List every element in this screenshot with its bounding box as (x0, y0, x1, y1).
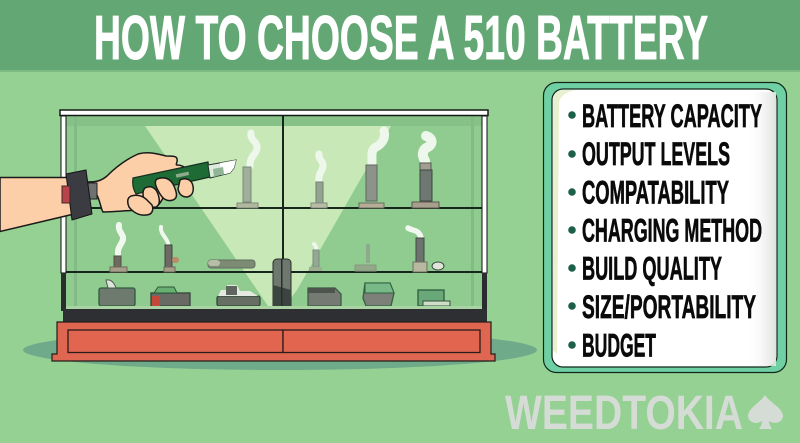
charger 2 (151, 287, 190, 306)
glass back (66, 116, 482, 311)
panel: checklist (544, 82, 786, 372)
light beam (145, 126, 391, 310)
fingers (128, 178, 193, 215)
vape 7 (309, 244, 322, 271)
palm (88, 153, 187, 212)
vape 1 (237, 133, 258, 208)
middle shelf vapes (110, 225, 444, 272)
top frame (60, 110, 488, 116)
vape 5 (110, 225, 127, 272)
vape 6 (161, 227, 179, 272)
display case (52, 110, 495, 361)
charger 3 (217, 285, 260, 306)
top shelf vapes (237, 131, 439, 208)
charger 5 (363, 283, 394, 306)
bottom shelf chargers (99, 280, 450, 306)
hand holding vape (0, 153, 236, 232)
charger 1 (99, 280, 135, 306)
case floor lines (66, 306, 482, 309)
vape horizontal (208, 260, 255, 268)
watch back (88, 183, 97, 199)
arm (0, 178, 74, 232)
vape 4 (412, 136, 439, 208)
checklist text (582, 98, 762, 364)
right post (482, 116, 487, 311)
center display stand (273, 259, 291, 310)
icon: spade (748, 395, 783, 429)
left post (61, 116, 66, 311)
vape 3 (359, 131, 385, 208)
vape 9 (408, 228, 444, 272)
red plinth (52, 322, 495, 361)
display case shadow (23, 330, 537, 370)
dark base (63, 309, 487, 323)
watermark: WEEDTOKIA (505, 387, 743, 440)
charger 6 (418, 290, 450, 306)
checklist text: BUDGET (582, 328, 656, 364)
vape 8 (355, 244, 376, 271)
charger 4 (308, 288, 341, 306)
title banner (0, 0, 800, 73)
red clasp (62, 186, 70, 203)
wristband (66, 170, 92, 220)
shelf lines (66, 116, 482, 273)
vape pen (133, 160, 236, 194)
vape 2 (311, 154, 327, 208)
bullets (568, 111, 576, 349)
